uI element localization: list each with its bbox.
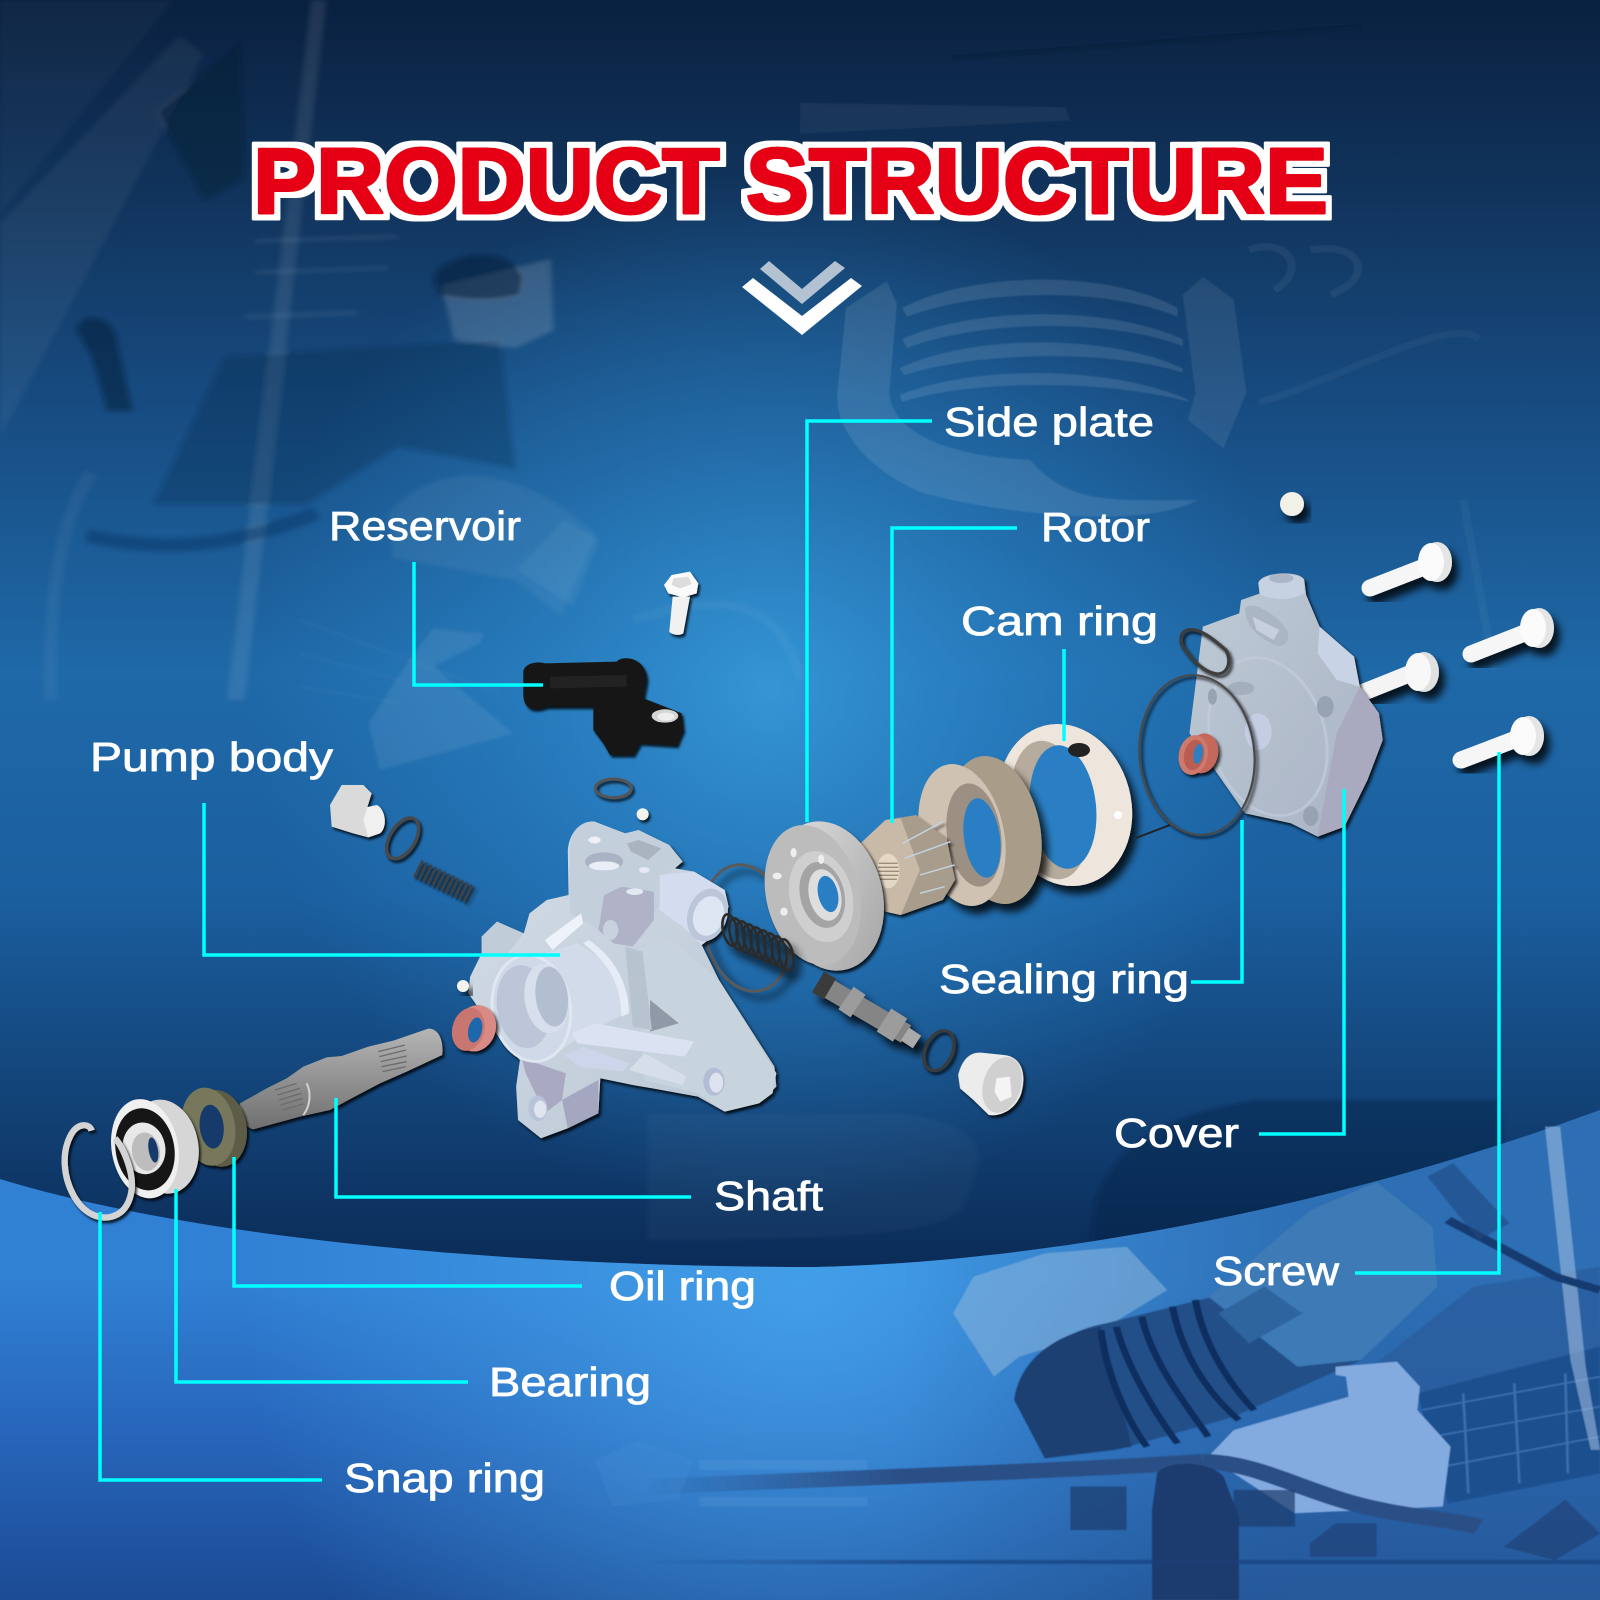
callout: Snap ring: Snap ring — [344, 1455, 545, 1501]
callout: Pump body — [90, 734, 560, 955]
callout: Oil ring — [234, 1157, 756, 1309]
part: screw B — [1471, 608, 1554, 654]
callout: Bearing — [176, 1189, 651, 1405]
icon: double chevron arrow — [742, 261, 862, 335]
part: screw A — [1370, 542, 1452, 588]
part: side plate — [753, 814, 897, 978]
panel: lower curved wave band — [0, 1110, 1600, 1600]
callout: Cover: Cover — [1114, 1110, 1239, 1156]
part: ball near body — [457, 980, 469, 992]
callout: Rotor: Rotor — [1041, 504, 1150, 550]
callout: Oil ring: Oil ring — [609, 1263, 756, 1309]
part: large o-ring behind body — [692, 856, 802, 1000]
part: reservoir connector — [523, 658, 683, 755]
part: snap ring — [65, 1125, 132, 1217]
callout: Reservoir — [329, 503, 543, 685]
part: cam ring — [980, 709, 1150, 901]
part: screw D — [1461, 716, 1544, 760]
part: sealing o-rings — [1133, 629, 1261, 838]
part: body spring — [720, 913, 796, 972]
part: screw C behind cover — [1364, 652, 1439, 692]
exploded pump diagram — [65, 492, 1554, 1217]
part: small ball — [1280, 492, 1304, 516]
callout: Reservoir: Reservoir — [329, 503, 521, 549]
part: oil ring — [175, 1083, 253, 1171]
part: valve o-ring and white plug — [919, 1027, 1028, 1116]
title: PRODUCT STRUCTURE — [253, 129, 1328, 233]
part: pump body — [468, 821, 776, 1138]
part: hex plug, o-ring and spring — [330, 785, 472, 895]
callout: Side plate — [807, 399, 1154, 822]
part: pressure ring — [906, 747, 1055, 914]
callout: Shaft — [336, 1098, 824, 1219]
callout: Screw: Screw — [1213, 1248, 1339, 1294]
callout: Shaft: Shaft — [714, 1173, 824, 1219]
part: shaft — [239, 1029, 443, 1129]
callout: Snap ring — [100, 1212, 545, 1501]
part: small o-ring and ball under connector — [595, 779, 649, 820]
background: lower left radiator cap ghost — [594, 1440, 867, 1507]
part: thin seal line — [1136, 825, 1170, 838]
callout: Cover — [1114, 789, 1344, 1156]
callout: Screw — [1213, 752, 1499, 1294]
callout: Cam ring: Cam ring — [961, 598, 1158, 644]
part: rotor — [861, 815, 955, 915]
callout: Rotor — [892, 504, 1150, 823]
callout: Side plate: Side plate — [944, 399, 1154, 445]
part: top flange bolt — [664, 572, 698, 635]
callout: Sealing ring: Sealing ring — [939, 956, 1189, 1002]
background: lower right engine detail — [647, 1127, 1600, 1600]
callout: Pump body: Pump body — [90, 734, 334, 780]
part: copper sleeve — [1176, 732, 1221, 777]
part: bearing — [103, 1094, 206, 1204]
part: copper bush — [448, 1002, 500, 1054]
part: relief valve — [818, 982, 917, 1042]
callout: Sealing ring — [939, 820, 1242, 1002]
callout: Bearing: Bearing — [489, 1359, 651, 1405]
part: cover — [1189, 573, 1383, 837]
